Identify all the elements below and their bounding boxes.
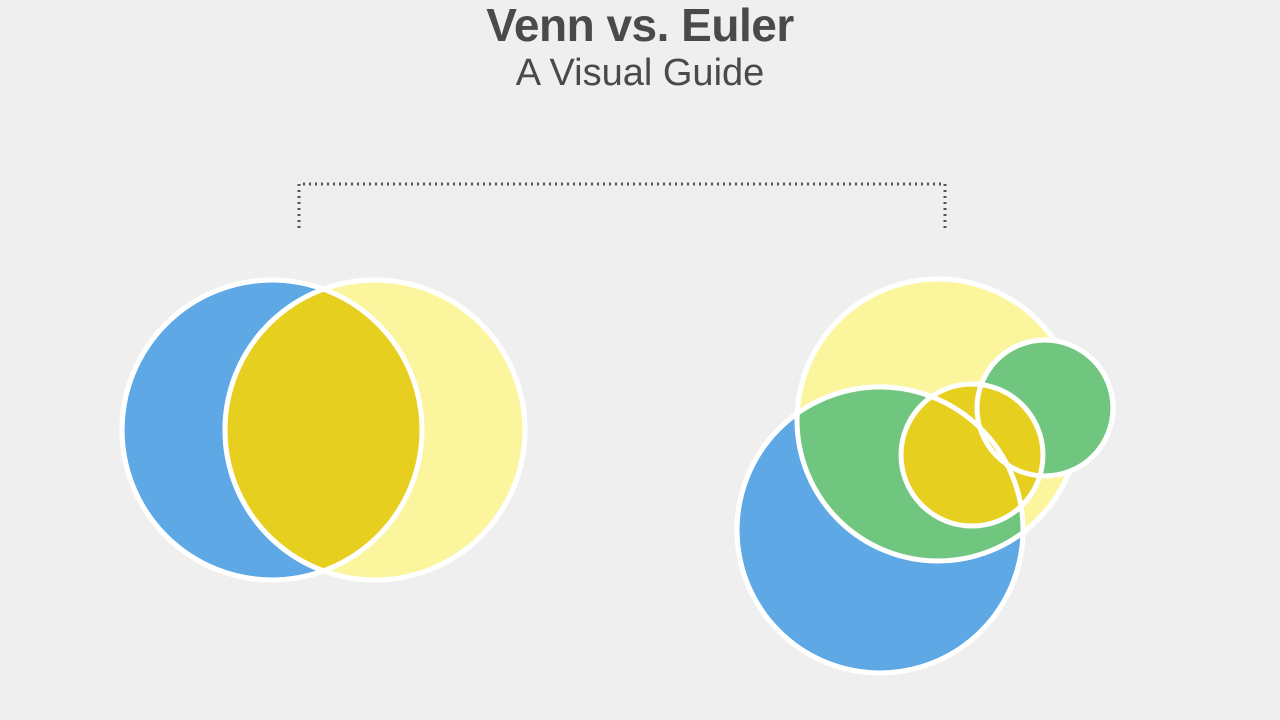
venn diagram bbox=[122, 280, 525, 580]
diagrams bbox=[120, 182, 1116, 676]
title: Venn vs. Euler bbox=[486, 0, 794, 51]
subtitle: A Visual Guide bbox=[516, 52, 764, 94]
dotted bracket bbox=[299, 184, 945, 228]
euler diagram bbox=[737, 279, 1113, 673]
